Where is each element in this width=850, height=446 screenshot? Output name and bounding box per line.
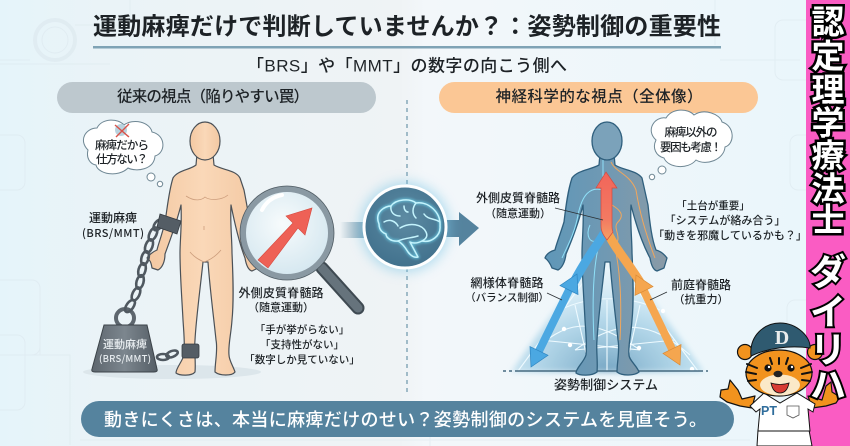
quotes: system view: 「土台が重要」 [676,199,750,212]
quotes: system view [653,199,807,242]
side band text: イ [810,292,846,332]
side band text [810,4,846,406]
side band text: ハ [810,364,846,406]
mascot: tiger: PT [761,404,777,418]
quotes: pitfalls: 「数字しか見ていない」 [244,353,360,366]
shackles [157,214,199,358]
mascot: tiger [720,323,840,446]
label: vestibulospinal tract [650,277,731,306]
arrow: blue reticulospinal [530,230,606,367]
thought bubble: 要因も考慮！ [660,140,722,154]
magnifier [240,186,358,308]
icon: crossed-out symbol [115,124,129,137]
side band text: 士 [812,202,844,238]
label: corticospinal tract [238,285,324,314]
nose [774,371,782,377]
side band text: 定 [812,38,844,74]
panel: neuroscience view [465,110,807,392]
label: vestibulospinal tract: （抗重力） [674,292,728,306]
quotes: pitfalls: 「手が挙がらない」 [255,323,349,336]
side band text: 学 [812,104,844,142]
chain [123,218,179,360]
label: corticospinal tract: 外側皮質脊髄路 [476,190,560,205]
side band text: 療 [812,138,844,174]
label: corticospinal tract: （随意運動） [248,300,314,314]
eyes [764,364,772,372]
label: reticulospinal tract: 網様体脊髄路 [470,275,544,290]
ground line [503,370,708,372]
quotes: system view: 「システムが絡み合う」 [665,213,785,227]
bottom banner: 動きにくさは、本当に麻痺だけのせい？姿勢制御のシステムを見直そう。 [104,410,707,430]
thought bubble: 仕方ない？ [96,152,148,166]
thought bubble [83,120,163,187]
heading pill: neuroscience view: 神経科学的な視点（全体像） [496,88,702,106]
heading pill: neuroscience view [439,82,758,113]
label: motor paralysis: 運動麻痺 [89,210,137,225]
side band [806,0,850,446]
icon: brain with arrow [340,182,479,272]
label: vestibulospinal tract: 前庭脊髄路 [671,277,731,292]
side band text: 法 [812,170,844,208]
quotes: pitfalls: 「支持性がない」 [260,338,344,351]
figure: nervous system body [545,122,667,375]
thought bubble: 麻痺だから [95,138,149,152]
mascot: tiger: D [775,327,789,349]
label: postural control system: 姿勢制御システム [554,378,658,392]
label: motor paralysis: (BRS/MMT) [82,225,144,241]
weight [92,309,157,372]
bottom banner [81,401,734,437]
label: corticospinal tract: （随意運動） [485,206,551,220]
mouth [771,383,789,393]
quotes: pitfalls [244,323,360,366]
cap [751,323,810,356]
shirt [750,393,815,431]
ears [738,344,752,360]
stripes [746,358,812,381]
weight: 運動麻痺 [103,337,147,351]
title: 運動麻痺だけで判断していませんか？：姿勢制御の重要性 [93,14,721,40]
network pyramid [511,235,704,372]
arms [720,380,755,408]
thought bubble [649,110,732,180]
side band text: リ [810,330,846,370]
label: reticulospinal tract: （バランス制御） [465,291,549,304]
arrow: orange vestibulospinal [606,228,681,365]
label: corticospinal tract [476,190,603,220]
heading pill: conventional view: 従来の視点（陥りやすい罠） [117,88,309,106]
heading pill: conventional view [57,82,376,113]
label: motor paralysis [82,210,144,241]
figure: chained body [147,122,258,375]
divider [406,100,408,395]
arrow: red corticospinal [596,172,617,240]
subtitle: 「BRS」や「MMT」の数字の向こう側へ [247,56,567,76]
legs [757,430,812,446]
label: reticulospinal tract [465,275,562,304]
muzzle [760,374,800,396]
panel: conventional view [82,120,360,379]
side band text: 認 [812,4,844,40]
thought bubble: 麻痺以外の [664,125,718,139]
label: corticospinal tract: 外側皮質脊髄路 [238,285,324,300]
side band text: 理 [812,72,844,108]
side band text: ダ [810,252,846,292]
head [746,350,812,396]
quotes: system view: 「動きを邪魔しているかも？」 [653,228,807,242]
weight: (BRS/MMT) [99,351,151,365]
